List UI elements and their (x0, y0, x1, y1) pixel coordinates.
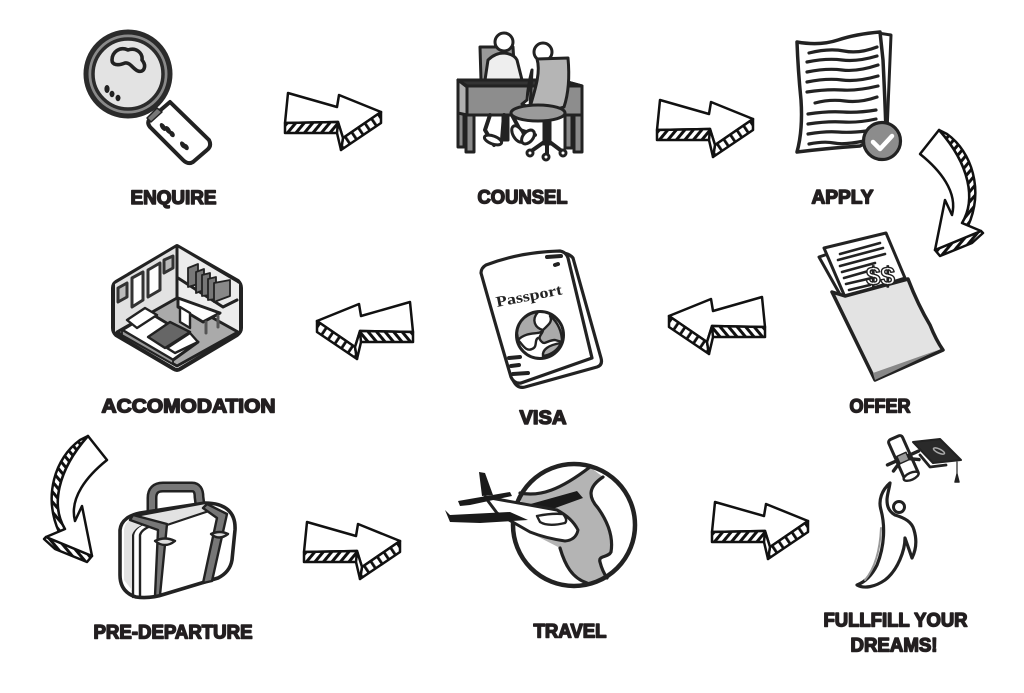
arrow: visa to accommodation (317, 302, 413, 359)
arrow: travel to fulfill dreams (712, 502, 808, 559)
passport title: Passport (495, 282, 564, 311)
panel: offer step (819, 233, 943, 418)
arrow: pre-departure to travel (304, 522, 400, 579)
panel: apply step (797, 32, 900, 208)
label: fullfill your dreams: DREAMS! (850, 634, 938, 656)
label: offer: OFFER (850, 396, 910, 418)
arrow: enquire to counsel (285, 93, 381, 150)
panel: enquire step (86, 32, 216, 209)
arrow: counsel to apply (657, 100, 753, 157)
icon: airplane and globe (445, 464, 635, 586)
icon: isometric dorm room (113, 246, 241, 370)
dollar signs: $$ (866, 261, 895, 291)
icon: magnifying glass (86, 32, 210, 163)
icon: suitcase (120, 487, 235, 598)
icon: counselling desk with two people (458, 33, 582, 160)
panel: pre-departure step (94, 487, 252, 644)
panel: fulfill your dreams step (824, 431, 968, 656)
label: pre-departure: PRE-DEPARTURE (94, 622, 252, 644)
label: fullfill your dreams: FULLFILL YOUR (824, 610, 968, 632)
icon: application papers with check badge (797, 32, 900, 160)
label: counsel: COUNSEL (478, 186, 568, 208)
label: apply: APPLY (812, 186, 874, 208)
arrow: offer to visa (669, 297, 765, 354)
panel: visa step (481, 251, 602, 429)
panel: accomodation step (102, 246, 276, 418)
arrow: accomodation to pre-departure, curved (44, 436, 107, 562)
label: visa: VISA (520, 407, 566, 429)
panel: travel step (445, 464, 635, 642)
icon: passport (481, 251, 602, 387)
label: travel: TRAVEL (534, 620, 607, 642)
label: fullfill your dreams (824, 610, 968, 656)
label: enquire: ENQUIRE (130, 187, 216, 209)
icon: graduate with diploma and cap (857, 431, 961, 587)
label: accomodation: ACCOMODATION (102, 396, 276, 418)
icon: offer letter in envelope with dollars (819, 233, 943, 380)
panel: counsel step (458, 33, 582, 208)
arrow: apply to offer, curved (920, 130, 983, 256)
